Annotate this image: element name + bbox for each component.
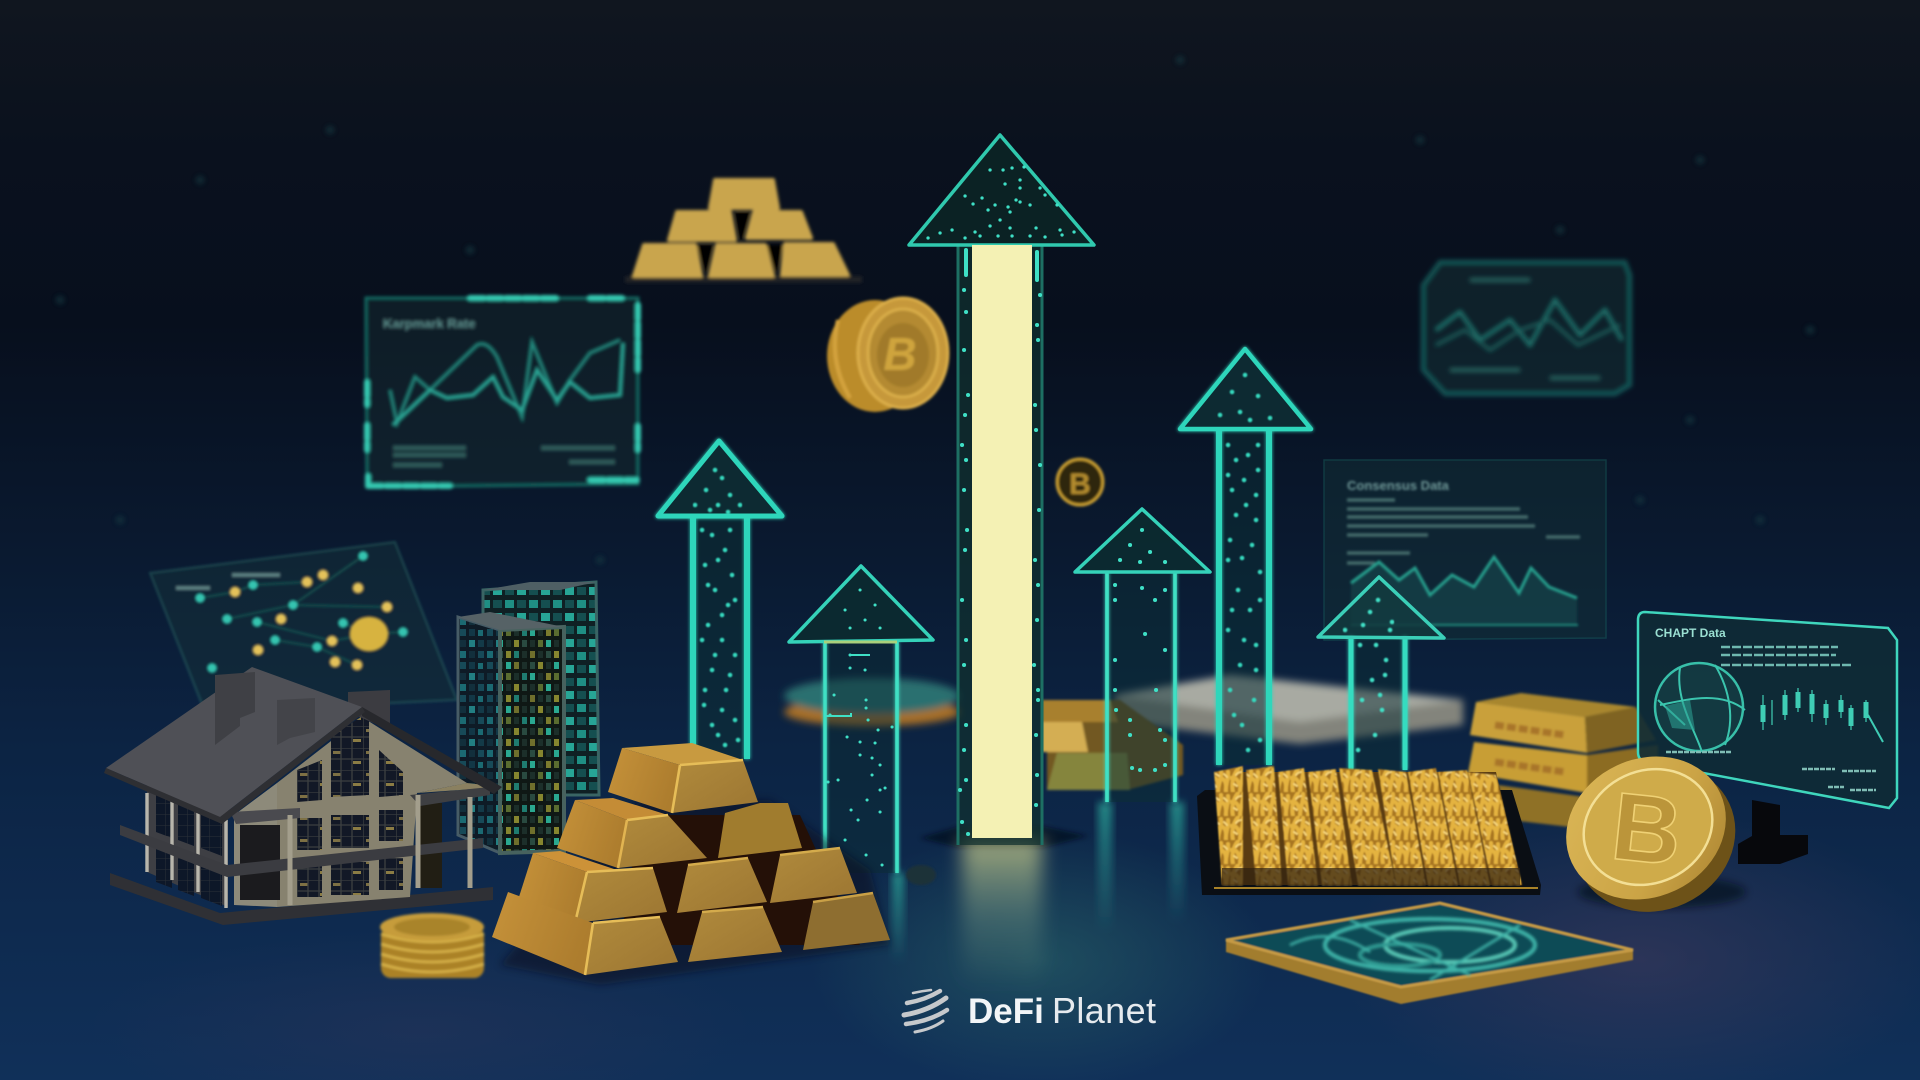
- bitcoin coin large: [1543, 731, 1760, 938]
- panel: middle-right chart: Consensus Data: [1347, 478, 1450, 493]
- background disk: [784, 678, 960, 726]
- arrow: central highlighted: [908, 135, 1095, 845]
- logo: DeFi Planet: [904, 990, 1156, 1032]
- arrow: right short: [1075, 509, 1210, 802]
- bitcoin coin large: B: [1607, 773, 1687, 886]
- gold bars right: [1468, 693, 1658, 827]
- panel: middle-right chart: [1324, 460, 1606, 640]
- panel: top-left market chart: Karpmark Rate: [383, 316, 476, 331]
- wheat field: [1197, 766, 1541, 895]
- panel: network nodes: [150, 542, 457, 712]
- background gold bars: [1042, 700, 1183, 790]
- floating bitcoin coin: B: [883, 328, 917, 380]
- coin stack: [380, 913, 484, 978]
- floating bitcoin coin: [827, 298, 948, 412]
- panel: far right globe and candles: [1638, 612, 1897, 808]
- arrow: left short: [789, 566, 933, 873]
- house: [104, 667, 502, 925]
- small floating coin: B: [1069, 468, 1091, 501]
- logo: DeFi Planet: DeFi: [968, 992, 1044, 1031]
- small floating coin: [1057, 459, 1103, 505]
- background plate: [1114, 675, 1463, 744]
- panel: far right globe and candles: CHAPT Data: [1655, 626, 1726, 640]
- panel: top-right chart: [1423, 262, 1630, 394]
- small dark stone: [906, 865, 936, 885]
- towers: [458, 582, 599, 853]
- arrow: left tall: [658, 441, 782, 759]
- floating gold pyramid: [625, 180, 862, 283]
- arrow: right tall: [1180, 349, 1311, 765]
- floor reflections: [892, 802, 1184, 988]
- circuit tile: [1226, 903, 1633, 1004]
- monitor stand: [1738, 800, 1808, 864]
- gold pyramid: [492, 743, 890, 985]
- icon: striped globe: [904, 990, 947, 1032]
- panel: top-left market chart: [366, 298, 638, 487]
- logo: DeFi Planet: Planet: [1052, 990, 1156, 1031]
- arrow: far right: [1318, 577, 1444, 770]
